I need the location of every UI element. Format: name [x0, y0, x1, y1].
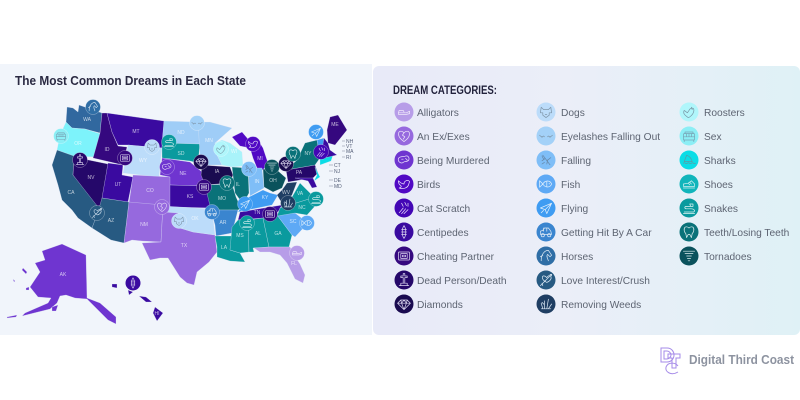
legend item: Shoes	[680, 174, 733, 194]
northeast state labels with leaders: NJ	[334, 169, 341, 175]
northeast state labels with leaders: CT	[334, 163, 341, 169]
state: South Carolina: SC	[290, 219, 297, 225]
state: New Hampshire and Massachusetts	[320, 138, 337, 159]
state: Arkansas	[211, 210, 238, 236]
map icon: IN falling	[242, 162, 256, 176]
title: The Most Common Dreams in Each State	[15, 73, 246, 88]
legend item: Diamonds	[394, 294, 463, 314]
state: Montana: MT	[132, 129, 140, 135]
state: Washington	[66, 105, 102, 133]
map icon: WY dogs	[144, 140, 160, 154]
state: Oklahoma	[163, 206, 215, 235]
legend item: Flying: Flying	[561, 204, 589, 215]
state: New York: NY	[305, 151, 312, 157]
state: North Carolina	[277, 198, 316, 216]
map icon: ND eyelashes	[190, 116, 204, 130]
state: Mississippi	[230, 220, 249, 253]
state: Florida	[254, 247, 305, 283]
state: Virginia: VA	[297, 191, 304, 197]
state: Wyoming	[123, 145, 162, 177]
state: Kentucky	[238, 190, 278, 212]
legend item: Diamonds: Diamonds	[417, 300, 463, 311]
state: Arizona: AZ	[108, 218, 114, 224]
state: Wisconsin: WI	[231, 149, 237, 155]
legend item: Alligators	[394, 102, 459, 122]
map icon: SC fish	[300, 216, 314, 230]
state: Mississippi: MS	[236, 233, 244, 239]
map icon: MS snakes	[240, 216, 254, 230]
legend item: Centipedes: Centipedes	[417, 228, 469, 239]
state: Louisiana: LA	[221, 245, 228, 251]
legend item: Eyelashes Falling Out: Eyelashes Falling Out	[561, 132, 660, 143]
state: Colorado: CO	[146, 188, 154, 194]
state: South Dakota: SD	[178, 151, 185, 157]
legend item: Tornadoes: Tornadoes	[704, 252, 752, 263]
map icon: IA diamonds	[194, 154, 208, 170]
map icon: NE murdered	[160, 160, 174, 174]
state: Ohio: OH	[269, 178, 277, 184]
legend item: Cheating Partner	[394, 246, 495, 266]
northeast state labels with leaders: MD	[334, 184, 342, 190]
state: Alaska: AK	[60, 272, 67, 278]
map icon: FL alligators	[290, 246, 304, 260]
state: Hawaii	[112, 284, 163, 321]
state: Illinois: IL	[236, 182, 240, 188]
state: Wisconsin	[215, 140, 243, 167]
state: Maine	[327, 115, 347, 145]
legend item: Removing Weeds	[536, 294, 641, 314]
legend item: An Ex/Exes: An Ex/Exes	[417, 132, 470, 143]
state: Connecticut and Rhode Island	[320, 155, 333, 165]
legend item: Being Murdered	[394, 150, 490, 170]
map icon: ID cheating	[118, 150, 132, 166]
state: Minnesota	[198, 122, 232, 165]
state: Kentucky: KY	[262, 195, 269, 201]
state: Oregon: OR	[74, 141, 82, 147]
legend item: Love Interest/Crush: Love Interest/Crush	[561, 276, 650, 287]
map icon: AR car	[204, 204, 220, 220]
legend item: Sharks	[680, 150, 736, 170]
legend item: Cat Scratch: Cat Scratch	[417, 204, 470, 215]
legend item: Roosters: Roosters	[704, 108, 745, 119]
state: Texas: TX	[181, 243, 188, 249]
legend item: Dogs	[536, 102, 585, 122]
legend item: Fish: Fish	[561, 180, 580, 191]
legend item: Cheating Partner: Cheating Partner	[417, 252, 495, 263]
state: Louisiana	[215, 236, 245, 262]
state: Minnesota: MN	[205, 138, 213, 144]
map icon: OK dogs	[172, 214, 186, 228]
state: Montana	[107, 113, 164, 148]
map icon: MI birds	[246, 136, 260, 152]
legend heading: DREAM CATEGORIES:	[393, 85, 497, 97]
northeast state labels with leaders: RI	[346, 155, 351, 161]
map icon: KS cheating	[196, 180, 212, 194]
legend item: Eyelashes Falling Out	[536, 126, 660, 146]
state: North Dakota	[162, 121, 200, 144]
northeast state labels with leaders: DE	[334, 178, 342, 184]
state: Oregon	[57, 122, 101, 157]
legend item: Dead Person/Death: Dead Person/Death	[417, 276, 506, 287]
state: Colorado	[129, 175, 171, 207]
state: Alabama	[248, 218, 269, 252]
northeast state labels with leaders: NH	[346, 139, 354, 145]
legend item: Getting Hit By A Car: Getting Hit By A Car	[561, 228, 652, 239]
map icon: KY flying	[238, 196, 252, 212]
state: Florida: FL	[291, 261, 297, 267]
legend item: Love Interest/Crush	[536, 270, 650, 290]
map panel background	[0, 64, 372, 335]
state: Iowa	[201, 165, 233, 185]
state: Kansas: KS	[187, 194, 194, 200]
legend item: An Ex/Exes	[394, 126, 470, 146]
state: Arizona	[92, 198, 129, 243]
map of United States	[7, 100, 354, 324]
legend item: Being Murdered: Being Murdered	[417, 156, 490, 167]
logo: Digital Third Coast	[661, 348, 795, 374]
state: South Carolina	[277, 213, 308, 237]
state: Tennessee	[238, 205, 282, 220]
legend item: Birds: Birds	[417, 180, 440, 191]
state: Utah: UT	[115, 182, 121, 188]
map icon: NC snakes	[308, 192, 324, 206]
legend item: Alligators: Alligators	[417, 108, 459, 119]
legend item: Sex: Sex	[704, 132, 722, 143]
map icon: PA diamonds	[278, 156, 294, 172]
state: North Carolina: NC	[298, 205, 306, 211]
state: Georgia	[263, 215, 292, 247]
legend item: Horses: Horses	[561, 252, 593, 263]
state: Tennessee: TN	[254, 210, 261, 216]
legend panel background	[373, 66, 800, 335]
state: Georgia: GA	[274, 231, 282, 237]
legend item: Dead Person/Death	[394, 270, 506, 290]
legend item: Sharks: Sharks	[704, 156, 736, 167]
state: West Virginia	[277, 182, 297, 205]
map icon: NY teeth	[286, 146, 300, 162]
legend item: Snakes	[680, 198, 738, 218]
state: Vermont	[317, 138, 324, 158]
legend item: Flying	[536, 198, 589, 218]
state: Illinois	[232, 167, 249, 204]
map icon: NM ex	[154, 200, 170, 214]
map icon: SD snakes	[162, 134, 176, 150]
state: California	[52, 150, 100, 228]
map icon: VT flying	[308, 124, 324, 140]
state: Michigan	[232, 132, 268, 170]
legend item: Roosters	[680, 102, 745, 122]
northeast state labels with leaders: VT	[346, 144, 352, 150]
state: Pennsylvania	[286, 165, 318, 182]
state: Missouri	[205, 184, 241, 210]
map icon: MO teeth	[220, 176, 234, 190]
map icon: WI roosters	[214, 142, 228, 156]
state: Utah	[102, 163, 133, 202]
map icon: WA horses	[86, 100, 100, 114]
state: Arkansas: AR	[220, 220, 227, 226]
state: Nevada	[73, 157, 108, 207]
legend item: Birds	[394, 174, 440, 194]
legend item: Sex	[680, 126, 722, 146]
map icon: MA cat scratch	[314, 144, 328, 160]
state: Pennsylvania: PA	[296, 170, 303, 176]
northeast state labels with leaders: MA	[346, 149, 354, 155]
state: Indiana	[248, 168, 264, 196]
state: Maryland	[295, 178, 317, 188]
state: Washington: WA	[83, 117, 92, 123]
legend item: Dogs: Dogs	[561, 108, 585, 119]
legend item: Falling	[536, 150, 591, 170]
state: Alaska	[7, 244, 116, 324]
legend item: Removing Weeds: Removing Weeds	[561, 300, 641, 311]
state: Nebraska: NE	[180, 171, 187, 177]
map icon: TN cheating	[262, 206, 278, 222]
state: New York	[286, 140, 320, 170]
legend item: Fish	[536, 174, 580, 194]
northeast state labels with leaders	[329, 139, 354, 190]
map icon: NV dead person	[72, 152, 88, 168]
state: California: CA	[68, 190, 75, 196]
state: New Mexico	[124, 202, 163, 243]
map icon: OR sex	[54, 128, 68, 144]
legend item: Getting Hit By A Car	[536, 222, 652, 242]
state: Idaho	[93, 113, 127, 165]
map icon: OH tornadoes	[264, 160, 280, 174]
state: West Virginia: WV	[282, 190, 291, 196]
state: Texas	[142, 205, 217, 285]
legend item: Cat Scratch	[394, 198, 470, 218]
state: Nevada: NV	[88, 175, 95, 181]
state: Kansas	[170, 185, 212, 208]
legend item: Snakes: Snakes	[704, 204, 738, 215]
map icon: WV weeds	[280, 196, 296, 210]
state: South Dakota	[162, 143, 200, 163]
legend item: Teeth/Losing Teeth	[680, 222, 789, 242]
map icon: HI centipedes	[126, 276, 140, 290]
legend item: Centipedes	[394, 222, 469, 242]
legend item: Horses	[536, 246, 593, 266]
state: Iowa: IA	[215, 169, 220, 175]
state: Michigan: MI	[257, 156, 263, 162]
legend item: Shoes: Shoes	[704, 180, 733, 191]
state: New Jersey and Delaware	[314, 167, 320, 181]
state: Oklahoma: OK	[191, 216, 199, 222]
state: Wyoming: WY	[139, 158, 148, 164]
state: Missouri: MO	[218, 196, 226, 202]
state: Alabama: AL	[255, 231, 261, 237]
state: New Mexico: NM	[140, 222, 148, 228]
legend item: Falling: Falling	[561, 156, 591, 167]
state: Indiana: IN	[254, 179, 260, 185]
legend item: Teeth/Losing Teeth: Teeth/Losing Teeth	[704, 228, 789, 239]
state: North Dakota: ND	[177, 130, 185, 136]
state: Idaho: ID	[104, 147, 110, 153]
legend item: Tornadoes	[680, 246, 752, 266]
map icon: AZ love interest	[90, 206, 104, 220]
state: Nebraska	[160, 158, 207, 186]
state: Ohio	[263, 169, 286, 192]
state: Hawaii: HI	[154, 311, 160, 317]
state: Virginia	[280, 183, 312, 208]
state: Maine: ME	[331, 122, 339, 128]
